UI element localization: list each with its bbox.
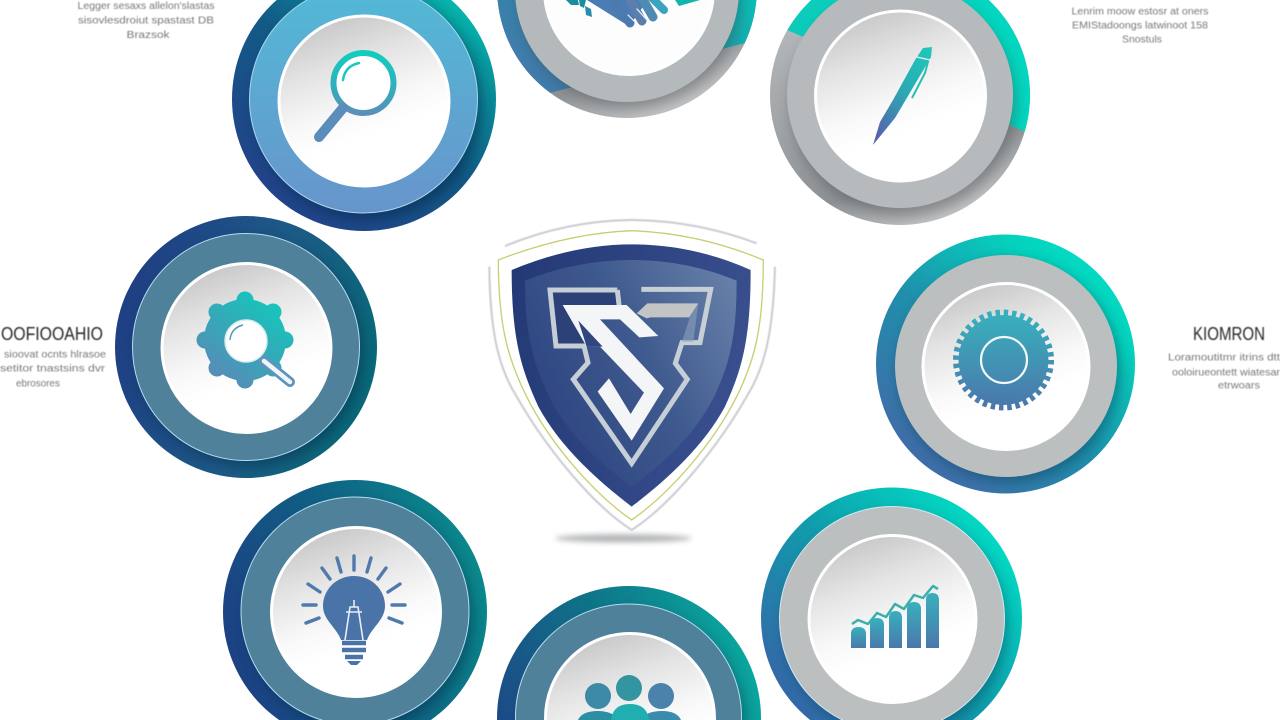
badge: handshake <box>498 0 756 118</box>
shield inner panel <box>525 260 737 487</box>
inner disc <box>923 284 1089 450</box>
shield shadow <box>555 534 692 542</box>
shield body <box>512 244 751 507</box>
text: right label: etrwoars <box>1218 380 1260 392</box>
text: top left <box>78 1 214 41</box>
icon: bar chart <box>851 586 939 648</box>
emblem grey bar <box>637 303 698 318</box>
outer ring <box>223 480 487 720</box>
outer ring <box>498 0 756 118</box>
badge: cog <box>876 234 1135 494</box>
outer ring <box>232 0 496 231</box>
icon: handshake <box>566 0 700 25</box>
middle ring <box>787 0 1013 208</box>
icon: gear and magnifier <box>196 292 294 388</box>
icon: pen <box>873 47 932 145</box>
text: left label: ebrosores <box>16 378 60 390</box>
icon: people <box>578 675 681 720</box>
text: right label <box>1168 324 1280 392</box>
central shield logo <box>489 220 775 542</box>
shield outer outline <box>489 220 775 530</box>
badge: pen <box>760 0 1040 225</box>
text: right label: ooloirueontett wiatesar <box>1172 368 1280 378</box>
text: left label <box>0 324 106 390</box>
icon: cog <box>956 313 1050 407</box>
inner disc <box>272 528 440 696</box>
inner disc <box>546 634 714 720</box>
text: left label: OOFIOOAHIO <box>1 324 103 344</box>
badge: gear with magnifier <box>115 216 377 478</box>
middle ring <box>780 506 1004 720</box>
text: right label: KIOMRON <box>1193 324 1265 344</box>
middle ring <box>250 0 478 213</box>
badge: bar chart <box>761 488 1022 720</box>
text: right label: Loramoutitmr itrins dtt <box>1168 352 1280 364</box>
outer ring <box>497 586 761 720</box>
middle ring <box>516 604 742 720</box>
inner disc <box>544 0 714 74</box>
text: top right: Lenrim moow estosr at oners <box>1072 6 1208 18</box>
icon: magnifying glass <box>319 53 394 137</box>
middle ring <box>241 497 469 720</box>
inner disc <box>816 11 986 181</box>
emblem letter S <box>563 305 664 441</box>
text: top right <box>1072 6 1208 46</box>
badge: magnifier <box>232 0 496 231</box>
inner disc <box>809 536 976 702</box>
badge: light bulb <box>223 480 487 720</box>
inner disc <box>279 16 449 186</box>
text: top right: Snostuls <box>1122 34 1162 46</box>
badge: people <box>497 586 761 720</box>
shield gold outline <box>498 231 763 520</box>
outer ring <box>761 488 1022 720</box>
text: top left: Brazsok <box>126 30 171 41</box>
emblem dark backing <box>552 292 618 345</box>
middle ring <box>515 0 739 102</box>
inner disc <box>162 264 331 432</box>
middle ring <box>132 234 360 460</box>
emblem outline <box>550 289 711 463</box>
outer ring <box>760 0 1040 225</box>
text: top left: Legger sesaxs allelon'slastas <box>78 1 214 12</box>
text: top left: sisovlesdroiut spastast DB <box>78 16 214 26</box>
middle ring <box>895 255 1117 477</box>
icon: light bulb <box>303 556 405 665</box>
text: left label: setitor tnastsins dvr <box>0 364 106 374</box>
outer ring <box>115 216 377 478</box>
text: left label: sioovat ocnts hlrasoe <box>4 350 106 360</box>
text: top right: EMIStadoongs latwinoot 158 <box>1072 20 1208 32</box>
outer ring <box>876 234 1135 494</box>
